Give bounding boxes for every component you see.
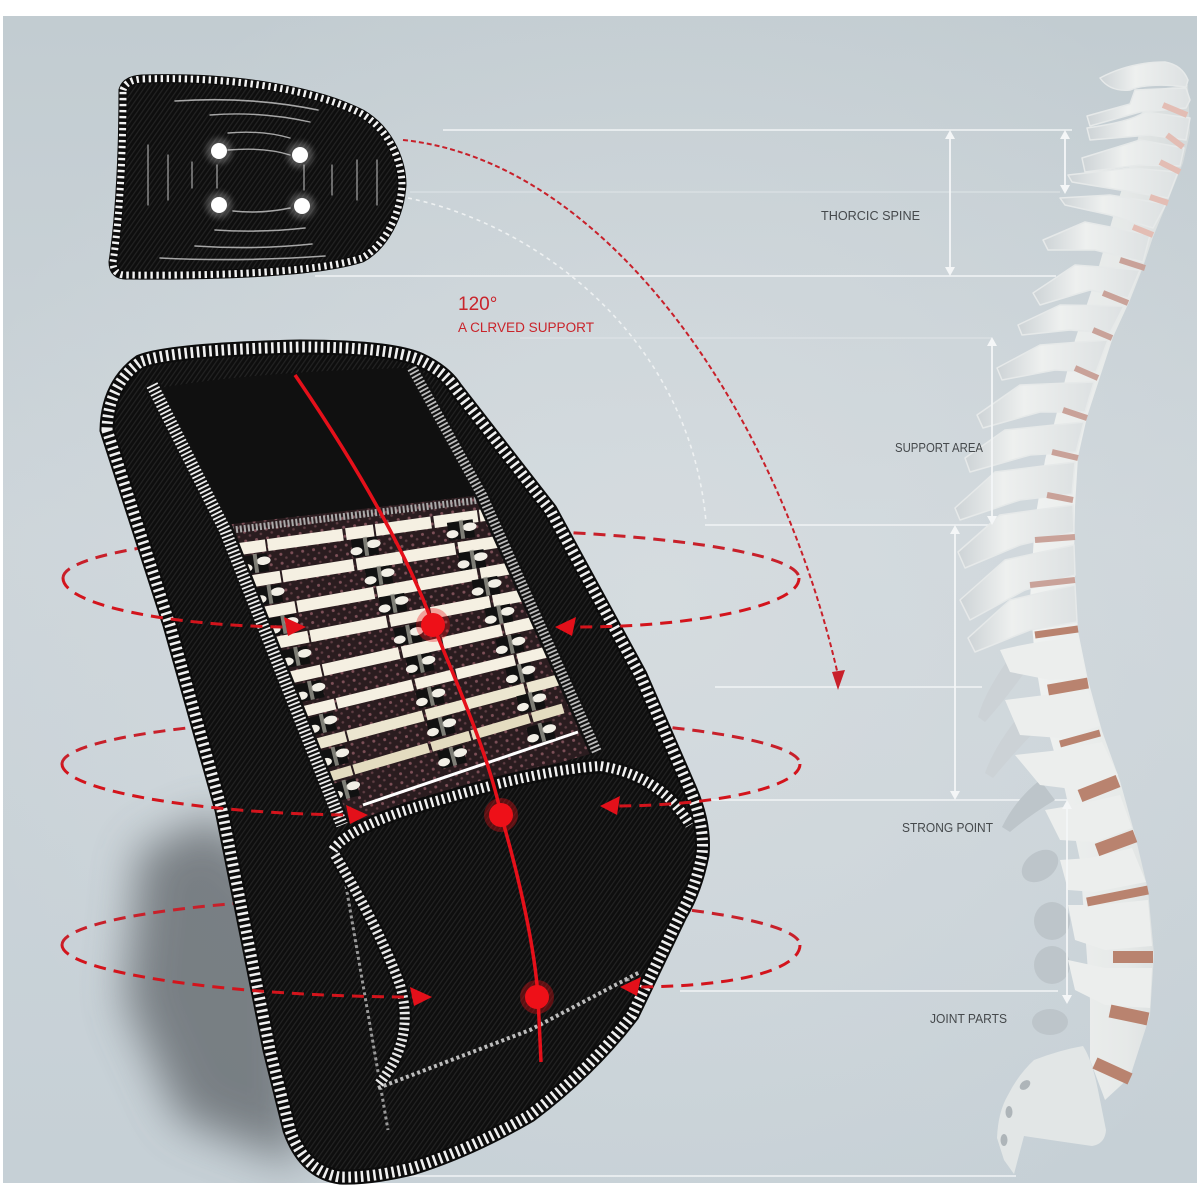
label: joint parts: JOINT PARTS (930, 1011, 1007, 1026)
thoracic vertebrae (955, 62, 1190, 652)
arrow: middle left (346, 805, 368, 824)
headrest rope border (113, 79, 402, 275)
arrow: lower left (410, 987, 432, 1006)
intervertebral discs (1030, 105, 1187, 1079)
arrow: support area span (987, 337, 997, 525)
side rails (152, 368, 628, 1130)
arrow: lower right (620, 977, 641, 996)
vertebral body column (1030, 85, 1190, 1100)
dashed support ellipses (front arcs with arrows) (62, 578, 800, 1006)
pad rope edge (333, 766, 690, 850)
arrow: middle right (600, 796, 620, 815)
bamboo slats (232, 515, 578, 805)
dashed support ellipses (rear arcs) (62, 529, 800, 945)
headrest cushion (113, 79, 402, 275)
upper mesh panel (160, 368, 478, 525)
arrow: upper left (284, 617, 306, 636)
bamboo massage panel (224, 495, 597, 825)
lumbar process lobes (978, 650, 1070, 1035)
panel top trim (224, 500, 480, 531)
label: strong point: STRONG POINT (902, 820, 993, 835)
spine illustration (955, 62, 1190, 1174)
sacrum (997, 1046, 1106, 1174)
main lumbar cushion (107, 347, 702, 1177)
slat joint checks (239, 518, 559, 803)
cushion rope border (107, 347, 702, 1177)
measurement guide lines (315, 130, 1072, 1176)
headrest contour lines (148, 100, 377, 260)
heading: 120 degree curved support: 120° (458, 294, 497, 315)
red spine alignment curve with pressure points (295, 375, 554, 1062)
labels (821, 208, 1007, 1026)
arrow: joint parts span (1062, 800, 1072, 1004)
red dashed 120 degree arc with arrow (403, 140, 845, 690)
arrow: upper right (555, 617, 576, 636)
headrest massage dots (206, 138, 315, 219)
heading: 120 degree curved support (458, 294, 594, 335)
lumbar vertebra wings (1000, 638, 1152, 1008)
heading: 120 degree curved support: A CLRVED SUPPORT (458, 320, 594, 335)
cushion cast shadow (125, 815, 300, 1165)
label: support area: SUPPORT AREA (895, 440, 983, 455)
sacral openings (1000, 1078, 1032, 1146)
lower lumbar pad (333, 766, 692, 1088)
white dashed arc (408, 198, 706, 522)
arrow: thoracic spine span (945, 130, 955, 276)
arrow: strong point span (950, 525, 960, 800)
arrow: upper vertebra span (1060, 130, 1070, 194)
cushion body (107, 347, 702, 1177)
dimension arrows (945, 130, 1072, 1004)
label: thoracic spine: THORCIC SPINE (821, 208, 920, 223)
pressure points (416, 608, 554, 1014)
